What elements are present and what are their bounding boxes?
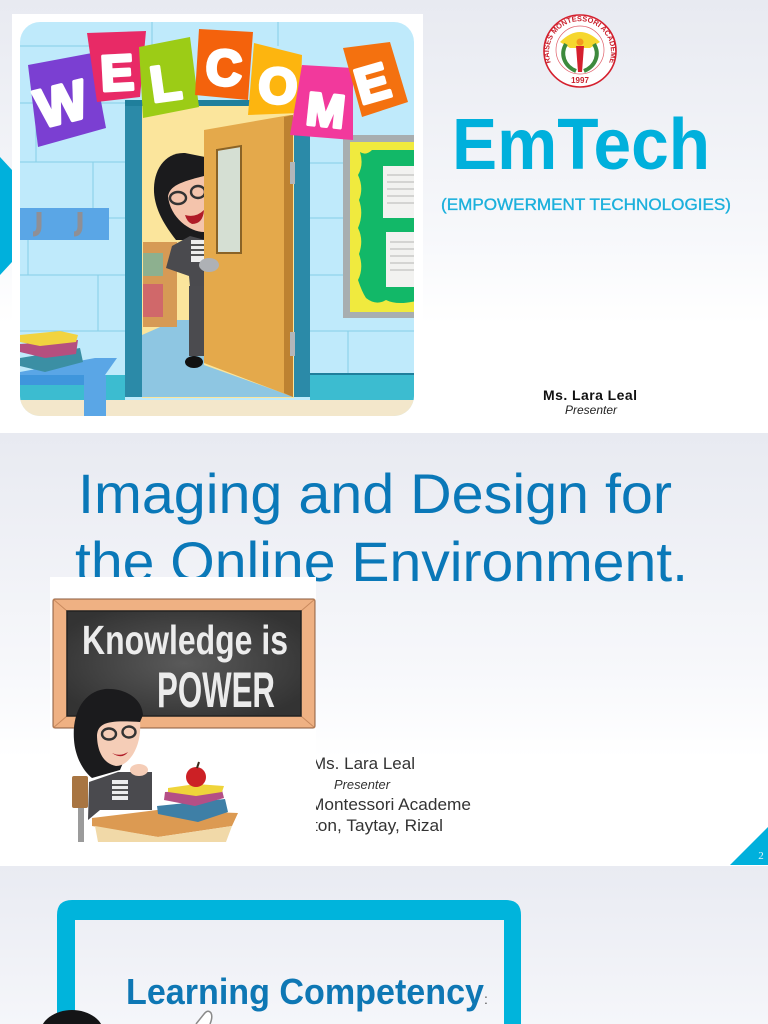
welcome letters: W <box>30 69 94 140</box>
welcome letters: E <box>349 52 396 115</box>
corner slide number <box>730 827 768 865</box>
door <box>204 115 293 397</box>
slide 2 heading: the Online Environment. <box>75 530 688 593</box>
logo: Raises Montessori Academe: RAISES MONTESSORI ACADEME <box>544 16 616 64</box>
logo: Raises Montessori Academe <box>543 14 617 88</box>
welcome letters: C <box>204 39 243 97</box>
corner slide number: 2 <box>758 850 764 862</box>
pencil tip, cropped <box>196 1011 212 1024</box>
panel: knowledge is power illustration: Knowledge is <box>82 617 288 663</box>
heading: learning competency: Learning Competency <box>126 971 484 1012</box>
teal baseboards <box>20 375 125 400</box>
welcome letters: L <box>147 53 185 113</box>
panel: knowledge is power illustration <box>50 577 316 842</box>
teacher hair, cropped <box>40 1010 104 1024</box>
slide 2 heading: Imaging and Design for <box>78 462 672 525</box>
panel: welcome illustration <box>12 14 423 432</box>
teacher at desk <box>74 689 143 778</box>
presenter details, left edge hidden behind image: Montessori Academe <box>310 795 471 814</box>
welcome letters: E <box>99 44 135 102</box>
left cyan hexagon tab <box>0 157 12 275</box>
coat hooks <box>20 208 109 240</box>
bulletin board <box>343 135 418 318</box>
books and apple <box>157 799 228 822</box>
classroom interior <box>142 105 294 398</box>
slide 1 background <box>0 0 768 432</box>
presenter details, left edge hidden behind image: Presenter <box>334 778 391 792</box>
slide 2 background <box>0 433 768 866</box>
floor <box>20 400 414 416</box>
panel: knowledge is power illustration: POWER <box>157 662 275 718</box>
presenter details, left edge hidden behind image: Ms. Lara Leal <box>312 755 415 773</box>
slide 3 background <box>0 866 768 1024</box>
subtitle: Empowerment Technologies: (EMPOWERMENT TECHNOLOGIES) <box>441 196 731 214</box>
panel: learning competency frame <box>40 900 521 1024</box>
presenter details, left edge hidden behind image: ton, Taytay, Rizal <box>313 816 443 835</box>
presenter name: Ms. Lara Leal <box>543 387 637 403</box>
welcome letters: M <box>304 82 347 138</box>
logo: Raises Montessori Academe: 1997 <box>571 76 589 85</box>
bench and books <box>20 358 117 375</box>
chalkboard <box>53 599 315 728</box>
slide 2 heading <box>75 462 688 593</box>
welcome letters <box>28 29 408 147</box>
presenter details, left edge hidden behind image <box>310 755 471 835</box>
door frame <box>125 100 142 397</box>
welcome letters: O <box>257 57 299 115</box>
teacher peeking <box>154 153 205 368</box>
desk <box>92 810 238 837</box>
title: EmTech: EmTech <box>452 105 710 185</box>
presenter role: Presenter <box>565 403 618 417</box>
colon: : <box>484 991 488 1007</box>
